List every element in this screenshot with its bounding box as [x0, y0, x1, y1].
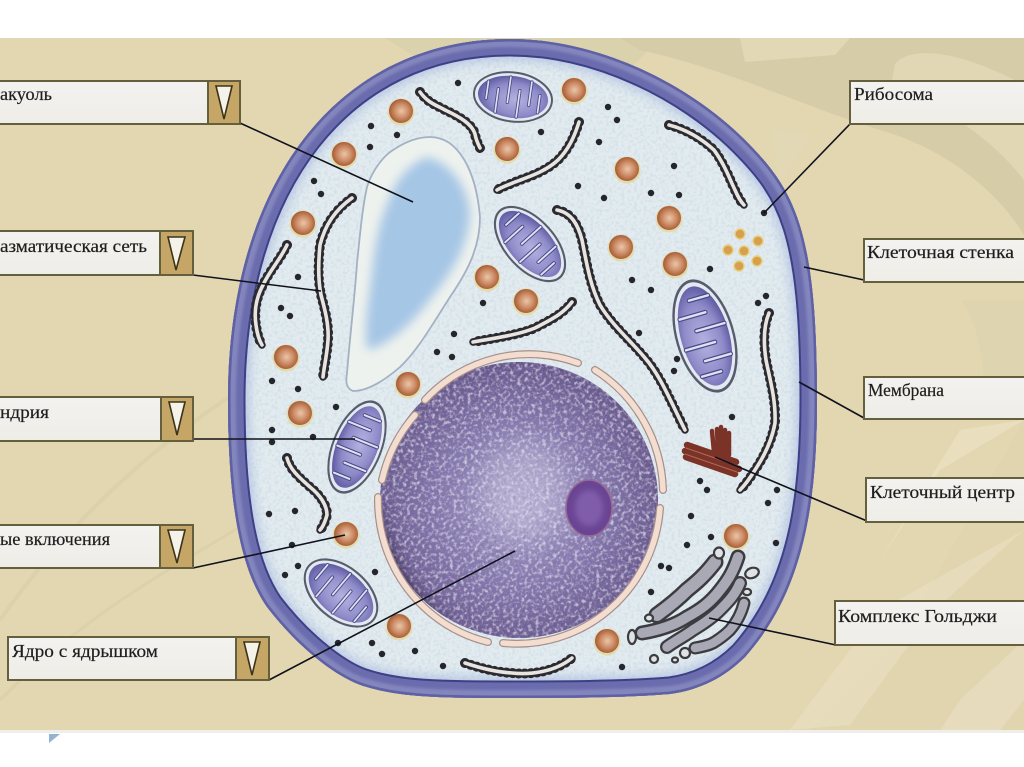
cytoplasm [220, 35, 820, 703]
blue corner marker [49, 734, 60, 743]
ribosome dots [266, 80, 780, 670]
inclusion vesicles [272, 78, 750, 656]
label: inclusions [0, 525, 193, 568]
label: cell wall: Клеточная стенка [867, 242, 1014, 262]
label: mitochondrion: ндрия [0, 402, 49, 422]
label: Golgi complex [835, 601, 1024, 645]
label: cell centre: Клеточный центр [870, 482, 1015, 502]
endoplasmic reticulum strands [255, 92, 775, 674]
icon: triangle [169, 402, 185, 435]
label: cell wall [864, 239, 1024, 282]
label: nucleus with nucleolus [8, 637, 269, 680]
label: ribosome [850, 81, 1024, 124]
nuclear envelope [378, 354, 663, 644]
leader lines [193, 123, 867, 680]
icon: triangle [168, 530, 185, 563]
label: inclusions: ые включения [0, 529, 110, 549]
label: cell centre [866, 478, 1024, 522]
nucleolus [566, 480, 612, 536]
label: ribosome: Рибосома [854, 84, 933, 104]
small yellow granule cluster [723, 229, 763, 271]
label: vacuole: акуоль [0, 84, 52, 104]
icon: triangle [244, 642, 260, 675]
plant cell [220, 35, 820, 703]
nucleus [370, 354, 670, 644]
label: endoplasmic reticulum [0, 231, 193, 275]
cell wall and membrane [228, 39, 817, 698]
vacuole [346, 137, 480, 391]
centrosome [685, 427, 739, 474]
label: vacuole [0, 81, 240, 124]
label: membrane [864, 377, 1024, 419]
icon: triangle [216, 86, 232, 119]
icon: triangle [168, 237, 185, 270]
label: mitochondrion [0, 397, 193, 441]
Golgi complex [628, 548, 760, 663]
mitochondria [292, 67, 748, 640]
label: nucleus with nucleolus: Ядро с ядрышком [12, 641, 158, 661]
label: endoplasmic reticulum: азматическая сеть [0, 236, 147, 256]
label: membrane: Мембрана [868, 380, 944, 400]
label: Golgi complex: Комплекс Гольджи [838, 606, 997, 626]
